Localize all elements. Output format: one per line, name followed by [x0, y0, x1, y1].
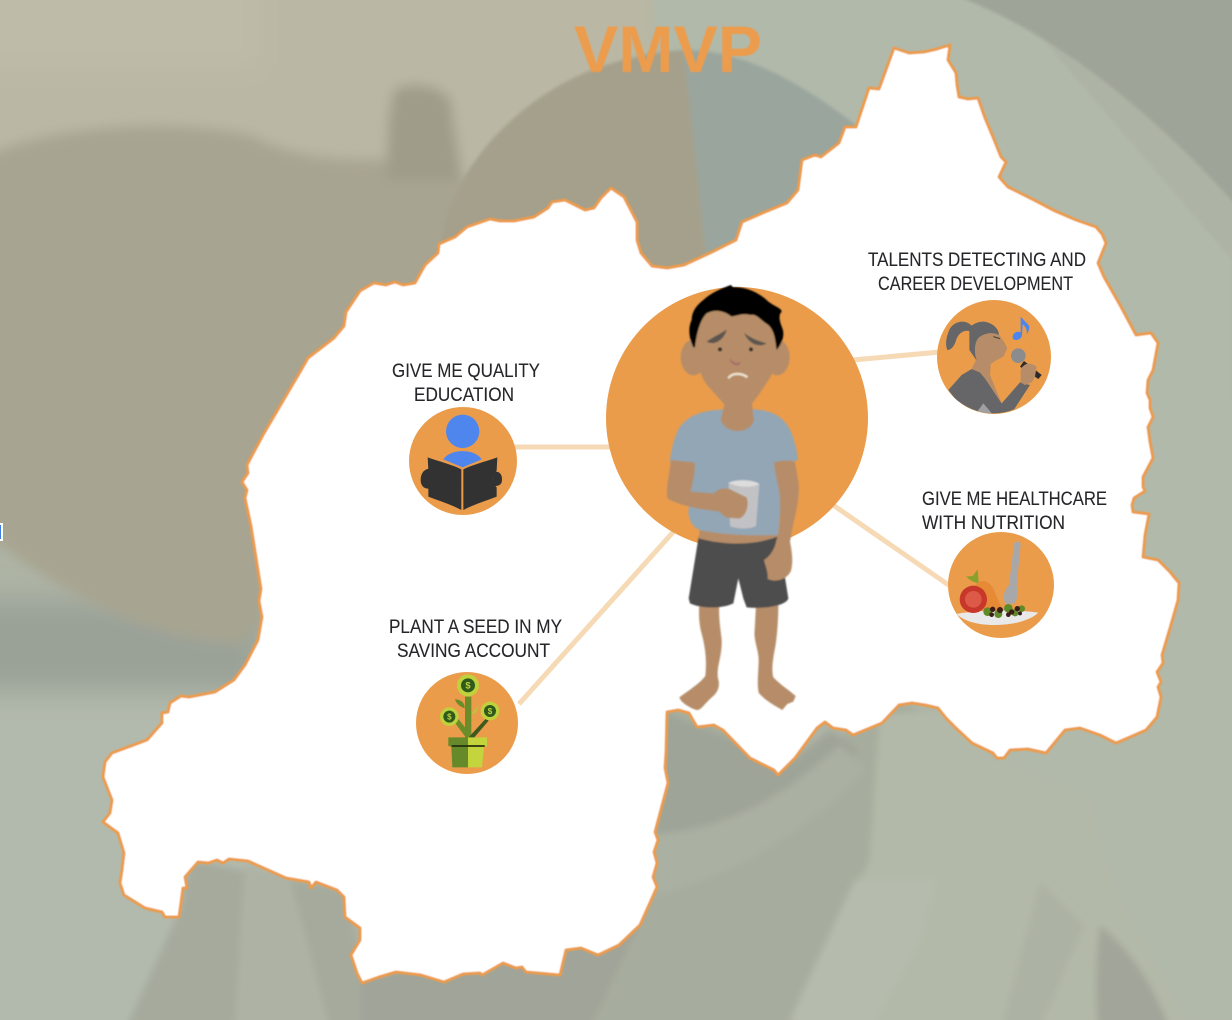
shirt	[670, 409, 798, 535]
title: VMVP	[574, 12, 762, 86]
label: talents: TALENTS DETECTING AND	[868, 250, 1086, 271]
label: healthcare: WITH NUTRITION	[922, 513, 1065, 534]
icon: sad child holding a glass	[667, 285, 799, 710]
connector lines	[515, 352, 950, 704]
hood and jacket	[860, 710, 1190, 1020]
belly	[699, 528, 778, 543]
left leg	[679, 603, 722, 710]
icon: reader with book	[421, 415, 502, 510]
label: healthcare	[922, 489, 1107, 534]
node: savings	[416, 672, 518, 774]
lower-left jacket	[125, 860, 640, 1020]
label: talents: CAREER DEVELOPMENT	[878, 274, 1073, 295]
icon: money plant: $	[488, 707, 493, 716]
icon: money plant: $	[465, 681, 471, 691]
hat dome	[440, 50, 708, 275]
icon: singer with microphone	[946, 317, 1042, 416]
glass	[729, 480, 759, 528]
right arm and hand	[764, 461, 799, 581]
label: education	[392, 361, 540, 406]
hair	[689, 285, 783, 350]
edge marker	[0, 523, 3, 541]
collar and sweater	[560, 700, 1000, 1020]
icon: money plant: $	[447, 713, 452, 722]
label: savings	[389, 617, 562, 662]
label: education: GIVE ME QUALITY	[392, 361, 540, 382]
node: healthcare	[948, 532, 1054, 638]
left arm	[667, 460, 748, 519]
label: talents	[868, 250, 1086, 295]
node: talents	[937, 300, 1051, 416]
hat brim	[0, 126, 470, 645]
right leg	[754, 603, 796, 710]
icon: plate of food	[957, 542, 1038, 625]
face	[695, 303, 777, 408]
shorts	[689, 537, 788, 608]
neck	[721, 402, 754, 431]
icon: music note	[1013, 317, 1029, 340]
node: education	[409, 407, 517, 515]
label: education: EDUCATION	[414, 385, 514, 406]
ears	[681, 339, 706, 375]
label: savings: PLANT A SEED IN MY	[389, 617, 562, 638]
label: savings: SAVING ACCOUNT	[397, 641, 550, 662]
top-right dark area	[940, 0, 1232, 210]
central circle	[606, 287, 868, 549]
eyes and brows	[707, 329, 727, 343]
mouth	[728, 374, 747, 378]
icon: money plant	[440, 674, 499, 767]
nose	[730, 359, 740, 365]
label: healthcare: GIVE ME HEALTHCARE	[922, 489, 1107, 510]
